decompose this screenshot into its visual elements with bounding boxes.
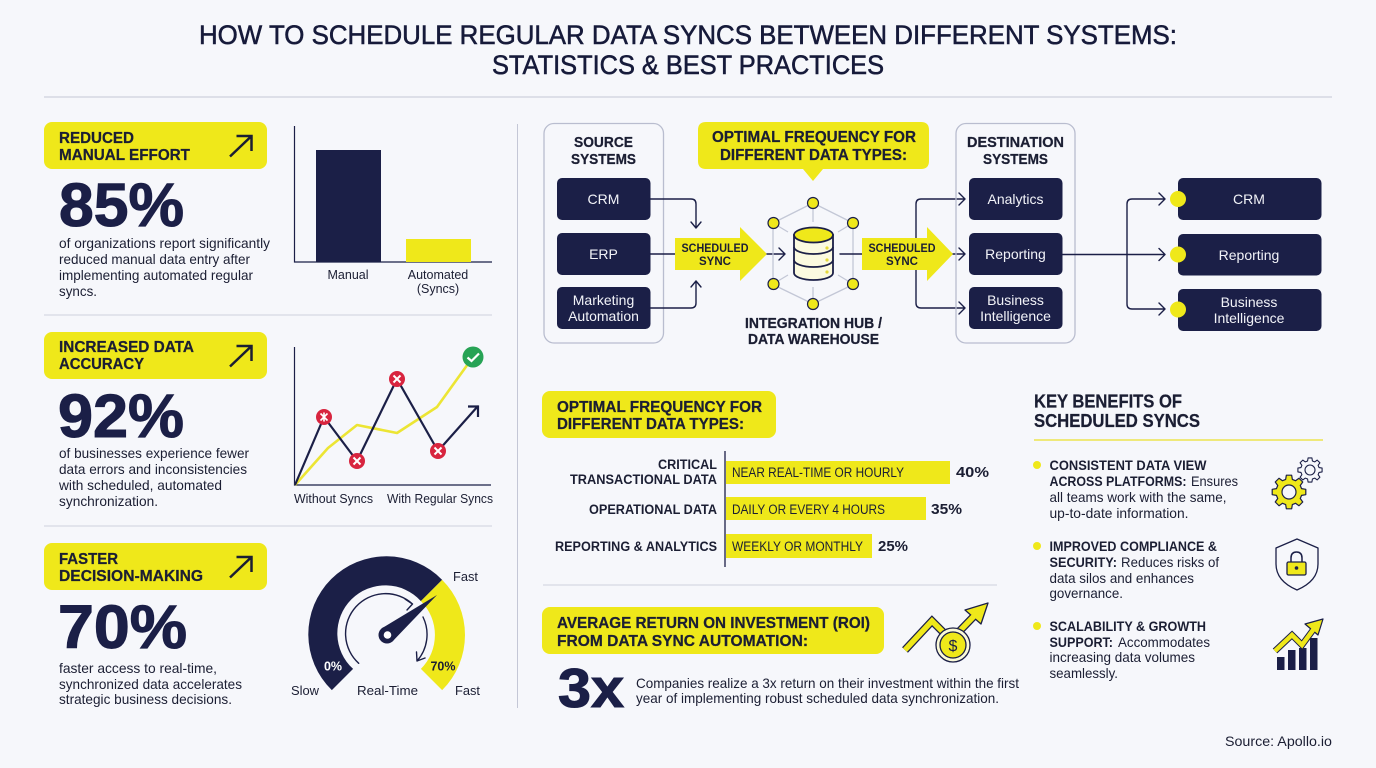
text: 70% description: faster access to real-time, <box>59 661 217 676</box>
heading: key benefits: KEY BENEFITS OF <box>1034 392 1182 412</box>
benefit: consistent data view: all teams work with the same, <box>1050 490 1226 505</box>
heading pill: optimal frequency <box>542 391 776 438</box>
panel: faster decision-making <box>44 543 481 707</box>
heading pill: increased data accuracy: ACCURACY <box>59 356 144 373</box>
bar chart: manual vs automated: Automated <box>408 268 468 282</box>
box: CRM: CRM <box>588 191 619 207</box>
title: HOW TO SCHEDULE REGULAR DATA SYNCS BETWEEN DIFFERENT SYSTEMS: <box>199 20 1177 50</box>
text: ROI description: Companies realize a 3x return on their investment within the first <box>636 676 1019 691</box>
bar chart: frequency by data type: DAILY OR EVERY 4 HOURS <box>732 502 885 517</box>
panel: source systems: SOURCE <box>574 135 633 151</box>
icon: ROI arrow and coin <box>905 603 988 662</box>
text: 85% description <box>59 236 270 299</box>
panel: key benefits <box>1033 392 1323 681</box>
bar chart: frequency by data type: REPORTING & ANALYTICS <box>555 539 717 554</box>
title: STATISTICS & BEST PRACTICES <box>492 50 884 80</box>
gauge: real-time speed: Real-Time <box>357 684 418 698</box>
box: Marketing Automation <box>557 287 650 329</box>
stat: 85%: 85% <box>59 171 184 239</box>
arrow: scheduled sync in <box>675 227 767 281</box>
arrow: sync into hub <box>767 248 785 260</box>
heading pill: faster decision-making <box>44 543 267 590</box>
benefit: improved compliance: Reduces risks of <box>1121 555 1219 570</box>
bar chart: frequency by data type: WEEKLY OR MONTHLY <box>732 539 863 554</box>
bar chart: frequency by data type: TRANSACTIONAL DATA <box>570 472 717 487</box>
callout: optimal frequency top: DIFFERENT DATA TYPES: <box>720 147 907 164</box>
text: 70% description <box>59 661 242 707</box>
panel: reduced manual effort <box>44 122 492 299</box>
benefit: scalability and growth: Accommodates <box>1118 635 1210 650</box>
box: Reporting <box>969 233 1062 275</box>
benefit: improved compliance: SECURITY: <box>1050 555 1117 570</box>
gauge: real-time speed: Fast <box>455 684 481 698</box>
box: Business Intelligence: Business <box>987 292 1044 308</box>
heading: key benefits: SCHEDULED SYNCS <box>1034 411 1200 431</box>
benefit: scalability and growth: SCALABILITY & GROWTH <box>1050 619 1206 634</box>
stat: 70%: 70% <box>58 593 187 661</box>
arrow: scheduled sync in: SYNC <box>699 256 731 268</box>
gauge: real-time speed: Slow <box>291 684 320 698</box>
box: Business Intelligence: Intelligence <box>980 308 1051 324</box>
text: 92% description: data errors and inconsistencies <box>59 462 247 477</box>
bar chart: frequency by data type: 35% <box>931 501 962 518</box>
panel: source systems: SYSTEMS <box>571 152 636 168</box>
box: ERP: ERP <box>589 246 618 262</box>
bar chart: frequency by data type: CRITICAL <box>658 457 717 472</box>
benefit: consistent data view: Ensures <box>1191 474 1238 489</box>
box: output Reporting <box>1170 234 1322 276</box>
benefit: consistent data view: ACROSS PLATFORMS: <box>1050 474 1186 489</box>
benefit: consistent data view <box>1033 458 1238 521</box>
box: output Business Intelligence: Business <box>1221 294 1277 310</box>
heading pill: optimal frequency: OPTIMAL FREQUENCY FOR <box>557 399 762 416</box>
arrows: hub to destination <box>840 193 965 314</box>
text: 92% description: synchronization. <box>59 494 158 509</box>
panel: optimal frequency chart <box>542 391 989 567</box>
box: output Business Intelligence <box>1170 289 1322 331</box>
text: 85% description: reduced manual data entry after <box>59 252 250 267</box>
diagram: integration hub: DATA WAREHOUSE <box>748 332 879 348</box>
text: 92% description: of businesses experience fewer <box>59 446 249 461</box>
diagram: integration hub <box>745 198 882 348</box>
box: Business Intelligence <box>969 287 1062 329</box>
bar chart: manual vs automated: (Syncs) <box>417 282 459 296</box>
arrow: scheduled sync out: SCHEDULED <box>868 243 936 255</box>
box: output Business Intelligence: Intelligence <box>1214 310 1285 326</box>
benefit: improved compliance: data silos and enhances <box>1050 571 1194 586</box>
box: output CRM <box>1170 178 1322 220</box>
benefit: improved compliance <box>1033 539 1219 601</box>
text: 92% description <box>58 446 249 509</box>
box: Marketing Automation: Marketing <box>573 292 634 308</box>
heading pill: increased data accuracy: INCREASED DATA <box>59 339 194 356</box>
bar chart: frequency by data type: 25% <box>878 538 908 555</box>
panel: destination systems <box>956 124 1075 343</box>
benefit: scalability and growth <box>1033 619 1210 681</box>
text: ROI description <box>636 676 1019 706</box>
arrow: scheduled sync out: SYNC <box>886 256 918 268</box>
line chart: without vs with syncs <box>294 346 493 506</box>
text: 70% description: synchronized data accelerates <box>59 677 242 692</box>
heading pill: ROI: FROM DATA SYNC AUTOMATION: <box>557 633 808 650</box>
text: 70% description: strategic business decisions. <box>59 692 232 707</box>
gauge: real-time speed: Fast <box>453 570 479 584</box>
box: output Reporting: Reporting <box>1219 247 1279 263</box>
benefit: improved compliance: IMPROVED COMPLIANCE & <box>1050 539 1217 554</box>
text: ROI description: year of implementing robust scheduled data synchronization. <box>636 691 999 706</box>
source credit: Source: Apollo.io <box>1225 733 1332 749</box>
text: 85% description: implementing automated regular <box>59 268 253 283</box>
heading pill: faster decision-making: FASTER <box>59 551 118 568</box>
panel: source systems <box>544 124 664 343</box>
heading pill: reduced manual effort: MANUAL EFFORT <box>59 147 190 164</box>
icon: ROI arrow and coin: $ <box>949 638 958 655</box>
panel: destination systems: DESTINATION <box>967 135 1064 151</box>
panel: ROI <box>542 603 1019 719</box>
title <box>199 20 1177 80</box>
bar chart: frequency by data type: NEAR REAL-TIME OR HOURLY <box>732 465 904 480</box>
bar chart: frequency by data type <box>555 451 989 567</box>
box: CRM <box>557 178 650 220</box>
benefit: scalability and growth: seamlessly. <box>1050 666 1118 681</box>
arrows: destination to outputs <box>1062 193 1165 315</box>
heading pill: increased data accuracy <box>44 332 267 379</box>
heading pill: reduced manual effort: REDUCED <box>59 130 134 147</box>
icon: gears <box>1272 458 1322 509</box>
heading pill: ROI <box>542 607 884 654</box>
heading pill: optimal frequency: DIFFERENT DATA TYPES: <box>557 416 744 433</box>
bar chart: manual vs automated: Manual <box>328 268 368 282</box>
gauge: real-time speed <box>291 556 481 698</box>
callout: optimal frequency top: OPTIMAL FREQUENCY FOR <box>712 129 916 146</box>
arrows: source systems to sync <box>650 199 701 308</box>
line chart: without vs with syncs: Without Syncs <box>294 492 373 506</box>
bar chart: manual vs automated <box>294 126 492 296</box>
gauge: real-time speed: 70% <box>430 660 456 674</box>
box: ERP <box>557 233 650 275</box>
bar chart: frequency by data type: 40% <box>956 464 989 481</box>
icon: shield lock <box>1276 539 1318 590</box>
benefit: consistent data view: up-to-date information. <box>1050 506 1188 521</box>
box: Marketing Automation: Automation <box>568 308 639 324</box>
text: 85% description: syncs. <box>59 284 97 299</box>
stat: 92%: 92% <box>58 382 184 450</box>
box: output CRM: CRM <box>1233 191 1265 207</box>
box: Reporting: Reporting <box>985 246 1046 262</box>
diagram: integration hub: INTEGRATION HUB / <box>745 316 882 332</box>
benefit: scalability and growth: increasing data volumes <box>1050 650 1195 665</box>
benefit: scalability and growth: SUPPORT: <box>1050 635 1113 650</box>
callout: optimal frequency top <box>698 122 929 181</box>
stat: 3x: 3x <box>558 657 624 719</box>
line chart: without vs with syncs: With Regular Syncs <box>387 492 493 506</box>
text: 85% description: of organizations report significantly <box>59 236 270 251</box>
box: Analytics <box>969 178 1062 220</box>
panel: destination systems: SYSTEMS <box>983 152 1048 168</box>
heading pill: ROI: AVERAGE RETURN ON INVESTMENT (ROI) <box>557 615 870 632</box>
benefit: improved compliance: governance. <box>1050 586 1123 601</box>
heading: key benefits <box>1034 392 1323 440</box>
heading pill: faster decision-making: DECISION-MAKING <box>59 568 203 585</box>
benefit: consistent data view: CONSISTENT DATA VIEW <box>1050 458 1207 473</box>
icon: growth chart <box>1275 619 1323 670</box>
text: 92% description: with scheduled, automated <box>58 478 222 493</box>
box: Analytics: Analytics <box>987 191 1044 207</box>
icon: database <box>794 228 833 280</box>
gauge: real-time speed: 0% <box>324 660 342 674</box>
panel: increased data accuracy <box>44 332 493 509</box>
panel: output systems <box>1170 178 1322 331</box>
heading pill: reduced manual effort <box>44 122 267 169</box>
arrow: scheduled sync out <box>862 227 953 281</box>
arrow: scheduled sync in: SCHEDULED <box>682 243 748 255</box>
bar chart: frequency by data type: OPERATIONAL DATA <box>589 502 717 517</box>
